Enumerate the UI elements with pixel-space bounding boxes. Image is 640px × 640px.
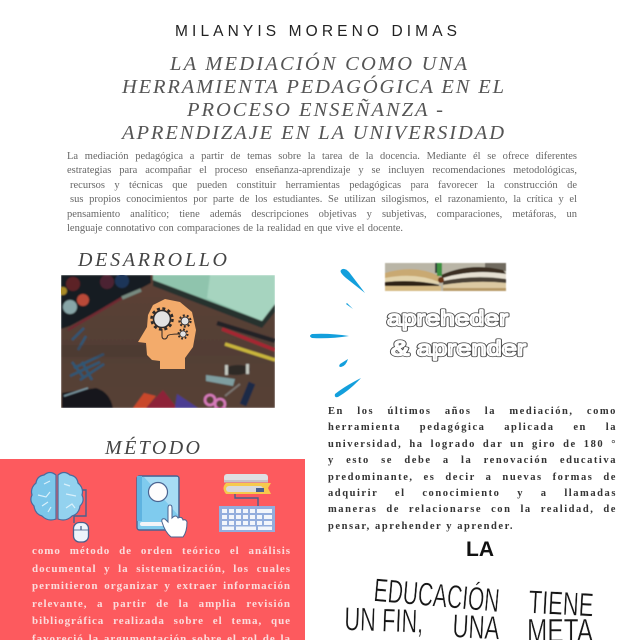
método paragraph: como método de orden teórico el análisis <box>32 545 291 557</box>
photo: desk with head and gears <box>61 275 275 408</box>
icon: books and keyboard <box>219 474 275 532</box>
main title: HERRAMIENTA PEDAGÓGICA EN EL <box>121 74 504 98</box>
heading: desarrollo: DESARROLLO <box>77 249 227 271</box>
heading: método: MÉTODO <box>104 436 200 459</box>
red panel: método background <box>0 459 305 640</box>
intro paragraph: lenguaje connotativo con comparaciones de la realidad en que vive el docente. <box>67 223 403 234</box>
right paragraph: adquirir el conocimiento y a llamadas <box>328 488 617 499</box>
main title: LA MEDIACIÓN COMO UNA <box>169 51 467 75</box>
photo: open book <box>384 262 507 292</box>
right paragraph: maneras de relacionarse con la realidad, de <box>328 504 617 515</box>
right paragraph: predominante, es decir a nuevas formas de <box>328 472 617 483</box>
right paragraph: pensar, aprehender y aprender. <box>328 521 514 532</box>
icon: book and pointing hand <box>136 475 188 538</box>
handwritten phrase: la educación tiene un fin, una meta: EDUCACIÓN <box>372 571 501 619</box>
handwritten phrase: la educación tiene un fin, una meta: UN FIN, <box>344 600 424 640</box>
intro paragraph: pensamiento analítico; tiene además descripciones objetivas y subjetivas, comparaciones, metáforas, un <box>67 209 577 220</box>
intro paragraph: recursos y técnicas que pueden constituir herramientas pedagógicas para favorecer la construcción de <box>70 180 577 191</box>
main title <box>120 51 504 144</box>
head <box>138 299 196 369</box>
outlined heading: apreheder & aprender: apreheder <box>387 308 508 330</box>
right paragraph: universidad, ha logrado dar un giro de 180 ° <box>328 439 617 450</box>
icon: brain and mouse <box>30 472 90 543</box>
right paragraph: En los últimos años la mediación, como <box>328 406 617 417</box>
intro paragraph: sus propios conocimientos por parte de los estudiantes. Se utilizan silogismos, el razonamiento, la crítica y el <box>70 194 577 205</box>
right paragraph <box>328 406 617 532</box>
handwritten word: LA: LA <box>466 538 494 561</box>
método paragraph: permitieron organizar y extraer información <box>32 580 291 592</box>
método paragraph: bibliográfica realizada sobre el tema, que <box>32 615 291 627</box>
outlined heading: apreheder & aprender: apreheder <box>387 308 508 330</box>
outlined heading: apreheder & aprender: & aprender <box>391 338 526 360</box>
intro paragraph <box>67 151 577 234</box>
intro paragraph: La mediación pedagógica a partir de temas sobre la tarea de la docencia. Mediante él se ofrece diferentes <box>67 151 577 162</box>
handwritten phrase: la educación tiene un fin, una meta: TIENE <box>528 583 594 623</box>
main title: APRENDIZAJE EN LA UNIVERSIDAD <box>120 122 504 144</box>
main title: PROCESO ENSEÑANZA - <box>186 97 443 121</box>
outlined heading: apreheder & aprender: & aprender <box>391 338 526 360</box>
right paragraph: herramienta pedagógica aplicada en la <box>328 422 617 433</box>
right paragraph: y esto se debe a la renovación educativa <box>328 455 617 466</box>
método paragraph <box>32 545 291 640</box>
intro paragraph: estrategias para acompañar el proceso enseñanza-aprendizaje y se incluyen recomendaciones metodológicas, <box>67 165 577 176</box>
método paragraph: documental y la sistematización, los cuales <box>32 562 291 574</box>
método paragraph: relevante, a partir de la amplia revisión <box>32 598 291 610</box>
author name: MILANYIS MORENO DIMAS <box>175 23 457 40</box>
